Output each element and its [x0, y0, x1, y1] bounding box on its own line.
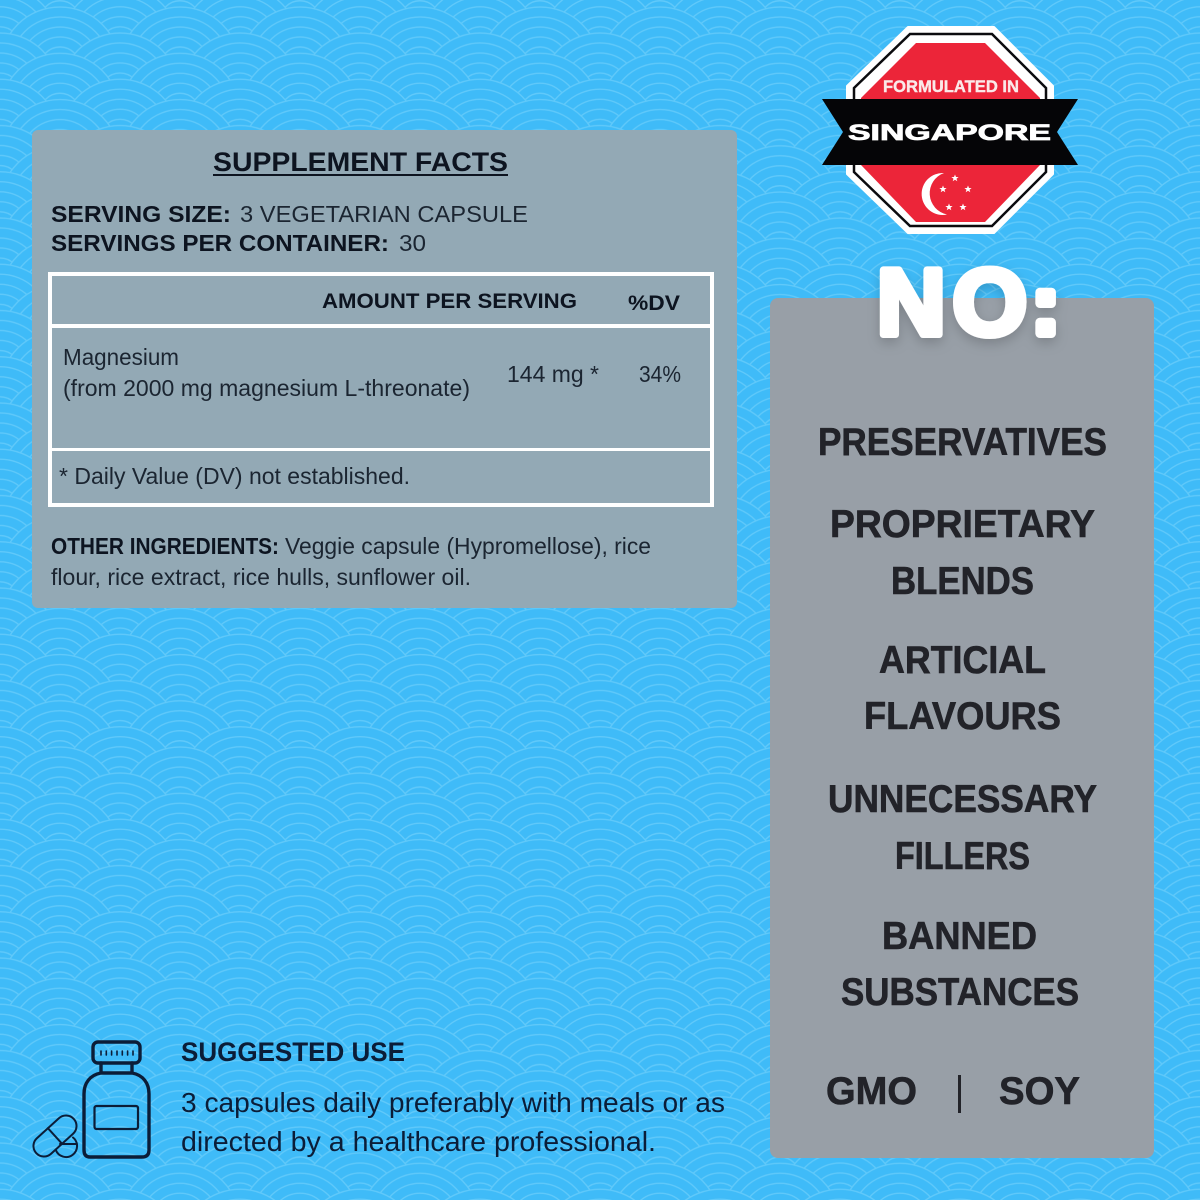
text: other ingredients: Veggie capsule (Hypromellose), rice [285, 533, 651, 559]
item: unnecessary fillers: FILLERS [895, 835, 1030, 878]
body: suggested use [181, 1087, 725, 1157]
item: artificial flavours: FLAVOURS [864, 695, 1061, 738]
badge text: formulated in: FORMULATED IN [883, 77, 1019, 96]
text: other ingredients [51, 533, 651, 590]
item: gmo and soy: GMO [826, 1070, 917, 1113]
item: artificial flavours [864, 639, 1061, 738]
heading: no: O [953, 250, 1027, 354]
item: banned substances [841, 915, 1079, 1014]
text: serving size: SERVING SIZE: [51, 201, 231, 227]
icon: supplement bottle and pills [33, 1042, 149, 1157]
heading: suggested use: SUGGESTED USE [181, 1037, 405, 1067]
text: serving size: 30 [399, 230, 426, 256]
body: suggested use: 3 capsules daily preferably with meals or as [181, 1087, 725, 1118]
table row: magnesium: 144 mg * [507, 361, 599, 387]
heading: supplement facts: SUPPLEMENT FACTS [213, 147, 508, 177]
heading: no: : [1032, 260, 1059, 352]
icon: crescent and stars [922, 173, 972, 215]
table row: magnesium: Magnesium [63, 344, 179, 370]
text: serving size: SERVINGS PER CONTAINER: [51, 230, 389, 256]
bottle body [84, 1063, 149, 1157]
item: gmo and soy [826, 1070, 1080, 1113]
table header: AMOUNT PER SERVING [322, 289, 577, 313]
item: proprietary blends: PROPRIETARY [830, 503, 1095, 546]
item: unnecessary fillers: UNNECESSARY [828, 778, 1097, 821]
table header: %DV [628, 291, 681, 315]
item: proprietary blends [830, 503, 1095, 603]
heading: no [877, 250, 1059, 354]
table footnote: * Daily Value (DV) not established. [59, 463, 410, 489]
item: gmo and soy: SOY [999, 1070, 1080, 1113]
text: other ingredients: OTHER INGREDIENTS: [51, 533, 279, 559]
heading: no: N [877, 250, 946, 354]
item: unnecessary fillers [828, 778, 1097, 878]
table row: magnesium: 34% [639, 361, 681, 387]
table row: magnesium: (from 2000 mg magnesium L-threonate) [63, 375, 470, 401]
icon: pills [33, 1115, 77, 1157]
item: preservatives: PRESERVATIVES [818, 421, 1107, 464]
text: serving size: 3 VEGETARIAN CAPSULE [240, 201, 528, 227]
item: artificial flavours: ARTICIAL [879, 639, 1046, 682]
item: banned substances: BANNED [882, 915, 1037, 958]
item: banned substances: SUBSTANCES [841, 971, 1079, 1014]
body: suggested use: directed by a healthcare professional. [181, 1126, 656, 1157]
badge: formulated in singapore [822, 27, 1078, 233]
text: serving size [51, 201, 528, 256]
text: other ingredients: flour, rice extract, rice hulls, sunflower oil. [51, 564, 471, 590]
bottle cap [93, 1042, 140, 1063]
ribbon text: singapore: SINGAPORE [848, 120, 1051, 145]
table header [322, 289, 681, 315]
ribbon [822, 99, 1078, 165]
text block: suggested use [181, 1037, 725, 1157]
item: proprietary blends: BLENDS [891, 560, 1034, 603]
table: nutrient amounts [50, 274, 712, 505]
bottle label [94, 1106, 138, 1129]
panel: supplement facts [32, 130, 737, 608]
panel: no list [770, 250, 1154, 1158]
table row: magnesium [63, 344, 681, 401]
